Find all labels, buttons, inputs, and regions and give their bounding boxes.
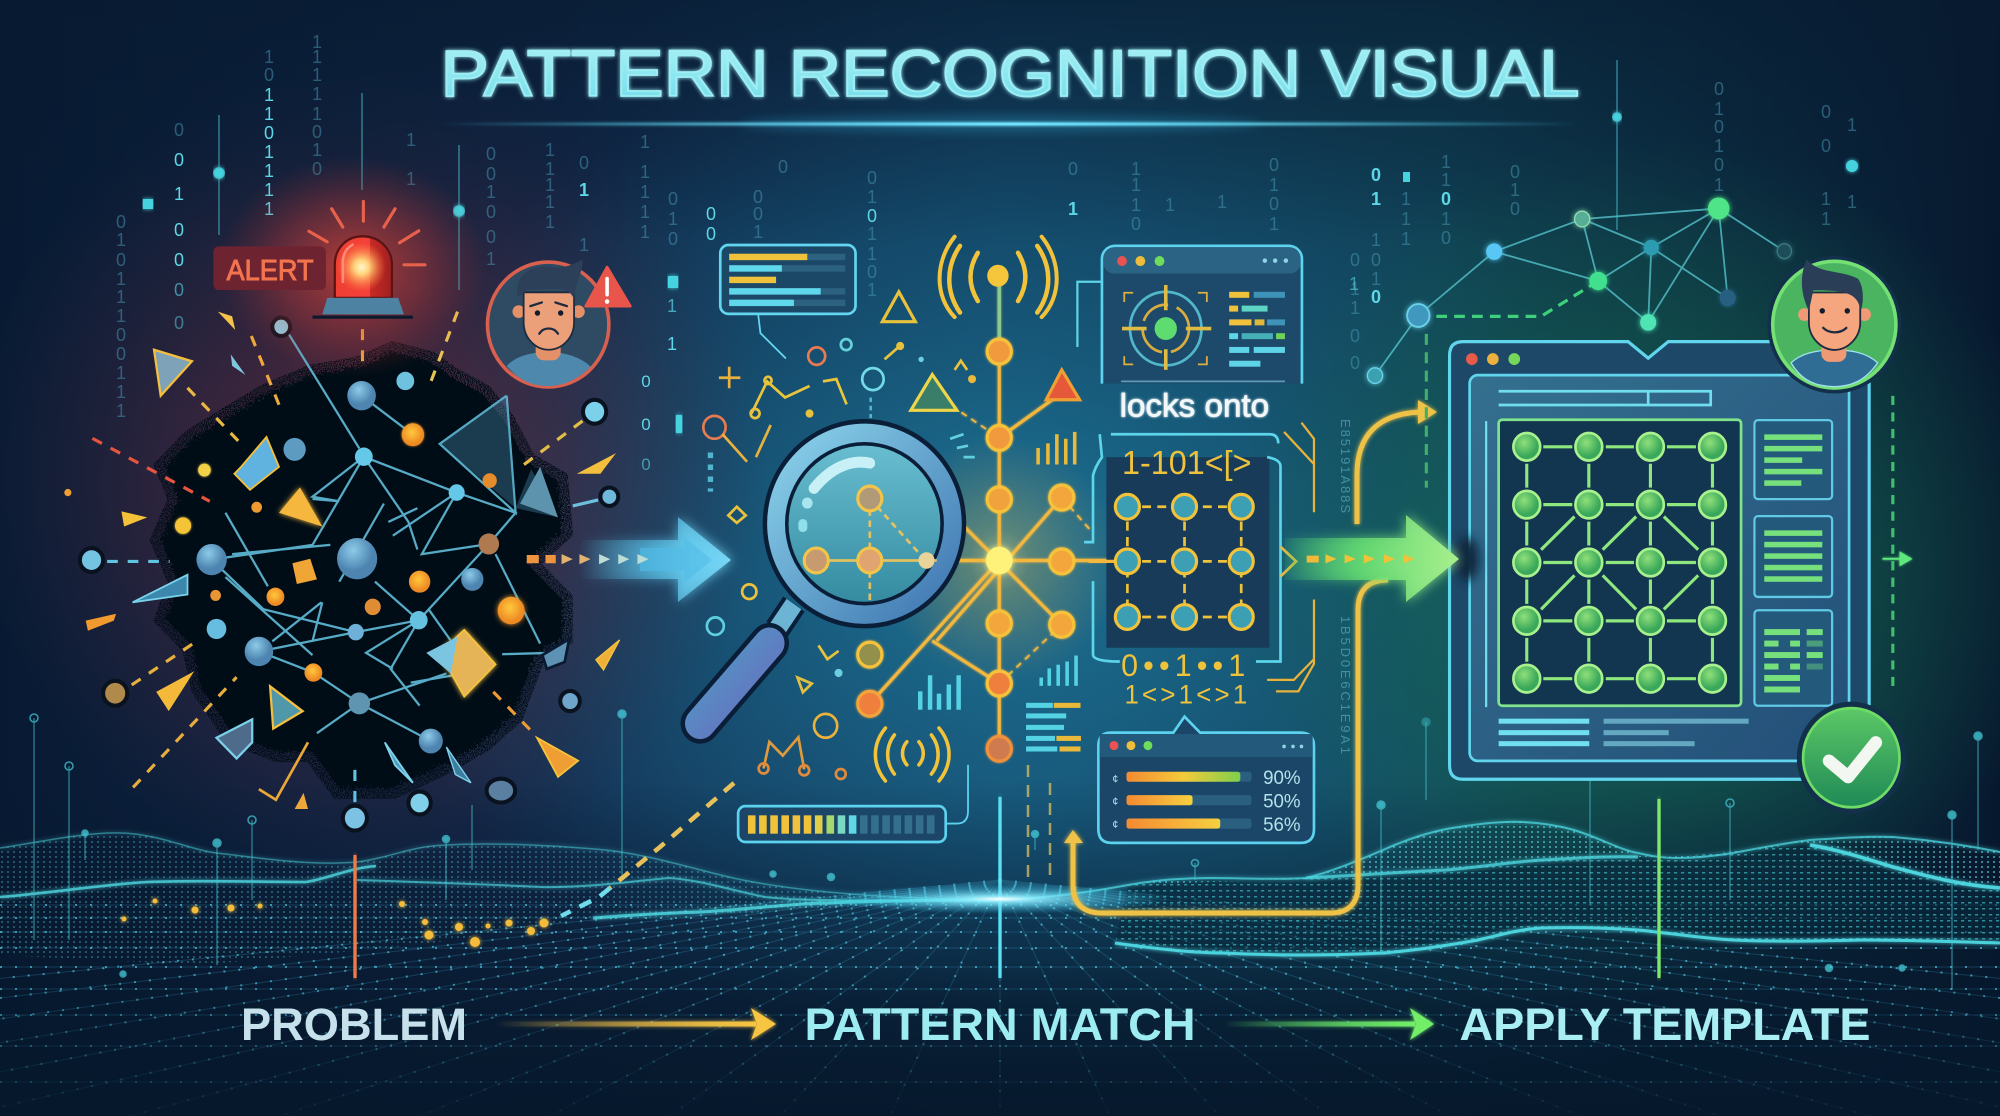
binary data rain: 1: [264, 180, 274, 200]
binary data rain: 1: [867, 224, 877, 244]
binary data rain: 1: [116, 287, 126, 307]
footer lines: [1499, 719, 1749, 746]
icon: triangles: [882, 292, 1080, 410]
panel: apply template stage: [1367, 197, 1911, 814]
binary data rain: 1: [1068, 199, 1078, 219]
binary data rain: 0: [1510, 162, 1520, 182]
binary data rain: 1: [579, 235, 589, 255]
binary data rain: 1: [753, 222, 763, 242]
arrow: pattern match to apply template: [1223, 1008, 1434, 1040]
binary data rain: 0: [641, 372, 651, 391]
code strings: [1121, 444, 1251, 710]
binary data rain: 1: [1131, 175, 1141, 195]
binary data rain: 0: [1714, 117, 1724, 137]
binary data rain: 0: [641, 455, 651, 474]
small glyph scatter: [703, 339, 976, 779]
binary data rain: 0: [486, 227, 496, 247]
binary data rain: 1: [867, 280, 877, 300]
bottom flow labels: [241, 999, 1870, 1050]
small data strips: 1B5D0E6C1E9A1: [1338, 616, 1353, 754]
progress bar: [738, 765, 968, 842]
binary data rain: 1: [1165, 195, 1175, 215]
dashed lower route: [561, 783, 734, 916]
binary data rain: 0: [1714, 79, 1724, 99]
alert label: ALERT: [227, 255, 314, 287]
dashed side rail: [1889, 396, 1896, 692]
code strings: 1<>1<>1: [1124, 679, 1247, 710]
binary data rain: 1: [1441, 170, 1451, 190]
binary data rain: 0: [1441, 189, 1451, 209]
binary data rain: 0: [1441, 228, 1451, 248]
binary data rain: 1: [1714, 99, 1724, 119]
binary data rain: 1: [1714, 136, 1724, 156]
scattered terrain sparks: [122, 898, 548, 947]
window: confidence meters: [1098, 717, 1314, 843]
network connectors: [870, 283, 1115, 746]
binary data rain: 0: [1714, 155, 1724, 175]
binary data rain: 1: [1821, 209, 1831, 229]
horizon flare: [830, 884, 1170, 914]
binary data rain: 0: [1350, 250, 1360, 270]
binary data rain: 1: [640, 222, 650, 242]
binary data rain: 1: [486, 182, 496, 202]
binary data rain: 0: [174, 313, 184, 333]
binary data rain: 1: [867, 187, 877, 207]
binary data rain: 1: [1131, 159, 1141, 179]
binary data rain: 0: [116, 325, 126, 345]
binary data rain: 1: [312, 47, 322, 67]
outer ringed nodes: [80, 318, 618, 831]
matched pattern frame: [1084, 423, 1314, 710]
nodes: [858, 339, 1074, 761]
binary data rain: 0: [668, 189, 678, 209]
binary data rain: 1: [1441, 152, 1451, 172]
code strings: 0••1••1: [1121, 648, 1245, 683]
binary data rain: 1: [312, 104, 322, 124]
icon: signal bottom: [875, 728, 949, 781]
binary data rain: 0: [1371, 165, 1381, 185]
binary data rain: 0: [778, 157, 788, 177]
window: confidence meters: ¢: [1112, 773, 1118, 785]
binary data rain: 1: [312, 140, 322, 160]
connector: [1077, 282, 1102, 347]
problem stem line: [354, 855, 356, 978]
binary data rain: 1: [640, 202, 650, 222]
window: confidence meters: 90%: [1263, 768, 1301, 789]
avatar: happy person: [1767, 256, 1901, 394]
binary data rain: 1: [264, 142, 274, 162]
template window: [1450, 342, 1869, 779]
icon: signal top: [940, 237, 1057, 317]
binary data rain: 0: [264, 123, 274, 143]
binary data rain: 1: [1510, 180, 1520, 200]
binary data rain: 0: [753, 204, 763, 224]
binary data rain: 0: [1821, 136, 1831, 156]
binary data rain: 0: [1371, 287, 1381, 307]
arrow: pattern match to template: [1285, 515, 1479, 602]
dashed scatter lines: [92, 312, 598, 804]
binary data rain: 0: [486, 164, 496, 184]
binary data rain: 0: [1821, 102, 1831, 122]
binary data rain: 0: [706, 224, 716, 244]
binary data rain: 1: [174, 184, 184, 204]
magnifying glass: [700, 419, 966, 723]
title underline: [440, 116, 1580, 132]
arrow: problem to pattern match: [527, 517, 731, 602]
binary data rain: 1: [545, 212, 555, 232]
binary data rain: 1: [116, 306, 126, 326]
binary data rain: 0: [174, 220, 184, 240]
binary data rain: 0: [1068, 159, 1078, 179]
binary data rain: 1: [312, 65, 322, 85]
binary data rain: 1: [264, 85, 274, 105]
icon: target reticle: [1122, 285, 1211, 370]
binary data rain: 1: [264, 104, 274, 124]
binary data rain: 0: [867, 168, 877, 188]
locks onto label: locks onto: [1120, 387, 1269, 424]
alert label: [213, 157, 487, 377]
data beacon markers and lines: [143, 60, 1858, 433]
window: confidence meters: 56%: [1263, 815, 1301, 836]
binary data rain: 1: [640, 182, 650, 202]
pattern match stem line: [998, 797, 1002, 978]
binary data rain: 0: [312, 122, 322, 142]
binary data rain: 1: [116, 363, 126, 383]
binary data rain: 1: [1371, 189, 1381, 209]
icon: success check: [1797, 702, 1906, 814]
binary data rain: 1: [1349, 274, 1359, 294]
binary data rain: 1: [1441, 209, 1451, 229]
binary data rain: 1: [1131, 195, 1141, 215]
binary data rain: 1: [1269, 175, 1279, 195]
label: pattern match: PATTERN MATCH: [804, 999, 1196, 1050]
side panels: [1754, 420, 1832, 706]
blob of chaos: [161, 352, 562, 788]
binary data rain: 1: [116, 382, 126, 402]
avatar: worried person with warning: [487, 259, 630, 387]
binary data rain: 1: [1269, 214, 1279, 234]
central glow: [879, 436, 1120, 684]
label: problem: PROBLEM: [241, 999, 467, 1050]
terrain and perspective grid: [0, 822, 2000, 1116]
binary data rain: 0: [1269, 194, 1279, 214]
binary data rain: 1: [1217, 192, 1227, 212]
binary data rain: 0: [641, 415, 651, 434]
right lower mesh shade: [1115, 845, 2000, 955]
apply template stem line: [1658, 799, 1660, 978]
binary data rain: 0: [486, 144, 496, 164]
binary data rain: 1: [1371, 269, 1381, 289]
panel: problem stage: [64, 312, 620, 831]
binary data rain: 0: [116, 344, 126, 364]
binary data rain: 1: [312, 84, 322, 104]
binary data rain: 0: [486, 202, 496, 222]
binary data rain: 0: [1350, 326, 1360, 346]
binary data rain: 1: [406, 130, 416, 150]
shards: [86, 312, 620, 809]
binary data rain: 1: [116, 269, 126, 289]
window: confidence meters: ¢: [1112, 819, 1118, 831]
binary data rain: 0: [1269, 155, 1279, 175]
binary data rain: 1: [1401, 209, 1411, 229]
binary data rain: 1: [1350, 279, 1360, 299]
binary data rain: 0: [174, 250, 184, 270]
binary data rain: 0: [264, 65, 274, 85]
binary data rain: 0: [579, 153, 589, 173]
binary data rain: 1: [545, 175, 555, 195]
binary data rain: 0: [867, 206, 877, 226]
icon: alarm beacon: [309, 201, 425, 317]
binary data rain: 1: [1401, 229, 1411, 249]
window: target lock: [1102, 246, 1302, 384]
title: PATTERN RECOGNITION VISUAL: [440, 36, 1580, 110]
left dot mesh: [0, 833, 1000, 965]
tangled network lines: [212, 329, 554, 741]
binary data rain: 0: [1371, 250, 1381, 270]
dashed grid links: [1127, 507, 1241, 617]
binary data rain: 0: [174, 120, 184, 140]
binary data rain: 0: [116, 212, 126, 232]
code strings: 1-101<[>: [1122, 444, 1251, 481]
binary data rain: 1: [1847, 192, 1857, 212]
binary data rain: 1: [264, 161, 274, 181]
binary data rain: 1: [1714, 175, 1724, 195]
binary data rain: 1: [486, 249, 496, 269]
window: confidence meters: 50%: [1263, 791, 1301, 813]
yellow feedback route: [1064, 400, 1437, 913]
network constellation: [1367, 197, 1791, 488]
small data strips: [1338, 419, 1353, 754]
binary data rain: 1: [406, 169, 416, 189]
right upper dot skin: [1128, 822, 2000, 888]
small green arrow: [1883, 553, 1911, 565]
binary data rain: 1: [667, 296, 677, 316]
binary data rain: 0: [867, 262, 877, 282]
binary data rain: 1: [640, 162, 650, 182]
lollipop data markers: [30, 700, 1982, 990]
pattern nodes: [1115, 494, 1253, 629]
binary data rain: 0: [753, 187, 763, 207]
binary data rain: 0: [174, 280, 184, 300]
binary data rain: 1: [1401, 189, 1411, 209]
binary data rain: 1: [667, 334, 677, 354]
dashed stems beside match line: [1028, 765, 1050, 885]
binary data rain: 1: [116, 230, 126, 250]
binary data rain: 0: [668, 229, 678, 249]
nodes: [64, 372, 525, 753]
panel: pattern match stage: [700, 237, 1314, 843]
binary data rain: 1: [264, 199, 274, 219]
binary data rain: 0: [1131, 214, 1141, 234]
pattern grid: [1499, 420, 1741, 706]
binary data rain: 1: [668, 209, 678, 229]
binary data rain: 0: [312, 159, 322, 179]
central hub: [986, 547, 1013, 574]
binary data rain: [116, 32, 1857, 474]
binary data rain: 1: [116, 401, 126, 421]
binary data rain: 1: [579, 180, 589, 200]
binary data rain: 0: [1510, 199, 1520, 219]
terrain ridge lines: [0, 822, 2000, 955]
binary data rain: 0: [706, 204, 716, 224]
bar sparklines: [918, 432, 1081, 751]
binary data rain: 1: [1350, 298, 1360, 318]
binary data rain: 0: [116, 250, 126, 270]
binary data rain: 1: [545, 159, 555, 179]
binary data rain: 1: [312, 32, 322, 52]
label: apply template: APPLY TEMPLATE: [1460, 999, 1870, 1050]
arrow: problem to pattern match: [496, 1008, 776, 1040]
binary data rain: 0: [1350, 353, 1360, 373]
binary data rain: 1: [545, 192, 555, 212]
window: confidence meters: ¢: [1112, 796, 1118, 808]
binary data rain: 1: [264, 47, 274, 67]
binary data rain: 1: [640, 132, 650, 152]
binary data rain: 1: [867, 244, 877, 264]
binary data rain: 1: [1847, 115, 1857, 135]
binary data rain: 1: [1371, 230, 1381, 250]
small data strips: E85191A88S: [1338, 419, 1353, 513]
binary data rain: 1: [545, 140, 555, 160]
binary data rain: 0: [174, 150, 184, 170]
binary data rain: 1: [1821, 189, 1831, 209]
panel: mini log: [720, 245, 856, 358]
